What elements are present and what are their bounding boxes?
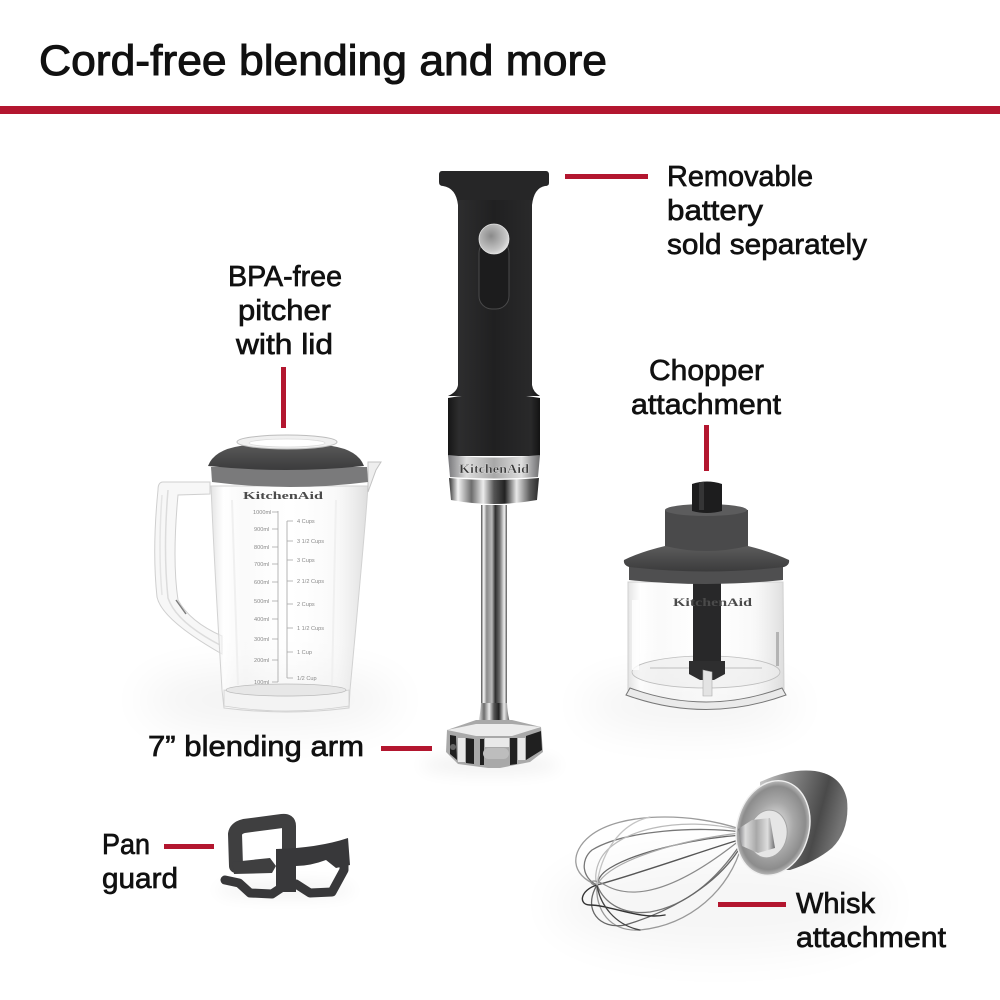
label: battery <box>667 195 764 227</box>
callout: pan guard <box>102 829 214 895</box>
shaft <box>481 505 507 705</box>
pitcher measurement scale: 3 Cups <box>297 558 315 564</box>
label: Pan <box>102 829 150 861</box>
leader line <box>381 746 432 751</box>
power button <box>479 224 509 254</box>
label: attachment <box>631 389 781 421</box>
leader line <box>281 367 286 428</box>
callout: removable battery <box>565 161 868 261</box>
label: Whisk <box>796 888 875 920</box>
leader line <box>565 174 648 179</box>
pan guard <box>225 821 350 894</box>
switch slot <box>479 240 509 309</box>
pitcher measurement scale: 4 Cups <box>297 519 315 525</box>
chopper <box>624 482 789 710</box>
label: sold separately <box>667 229 868 261</box>
callout: chopper <box>631 355 781 471</box>
handle body <box>439 171 549 504</box>
pitcher measurement scale: 2 Cups <box>297 602 315 608</box>
whisk head face <box>726 772 820 884</box>
leader line <box>718 902 786 907</box>
pitcher handle <box>155 482 222 654</box>
label: 7” blending arm <box>148 731 364 763</box>
label: with lid <box>235 329 333 361</box>
pitcher measurement scale: 3 1/2 Cups <box>297 539 324 545</box>
chopper lid disc <box>624 546 789 572</box>
pitcher jug <box>211 486 368 712</box>
pitcher measurement scale: 500ml <box>254 599 269 605</box>
leader line <box>164 844 214 849</box>
pitcher measurement scale: 100ml <box>254 680 269 686</box>
label: BPA-free <box>228 261 342 293</box>
whisk wires <box>576 817 742 930</box>
battery cap <box>439 171 549 205</box>
label: pitcher <box>238 295 331 327</box>
pitcher <box>155 435 381 712</box>
pitcher measurement scale: 1000ml <box>253 510 271 516</box>
whisk neck <box>745 807 791 861</box>
callout: blending arm <box>148 731 432 763</box>
chopper drive shaft <box>692 482 722 513</box>
pitcher measurement scale: 600ml <box>254 580 269 586</box>
label: guard <box>102 863 178 895</box>
blade guard <box>446 720 543 768</box>
floor shadows <box>140 672 890 955</box>
guard back loop <box>235 821 289 866</box>
chopper collar <box>665 506 748 551</box>
chopper brand: KitchenAid <box>673 597 753 609</box>
whisk ferrule <box>738 818 775 853</box>
label: attachment <box>796 922 946 954</box>
whisk <box>576 770 847 930</box>
guard front loop <box>225 848 344 894</box>
pitcher measurement scale: 200ml <box>254 658 269 664</box>
pitcher measurement scale: 1/2 Cup <box>297 676 317 682</box>
pitcher measurement scale: 800ml <box>254 545 269 551</box>
chopper inner shaft <box>693 583 721 663</box>
pitcher measurement scale <box>253 510 324 686</box>
pitcher measurement scale: 1 Cup <box>297 650 312 656</box>
pitcher measurement scale: 900ml <box>254 527 269 533</box>
pitcher measurement scale: 700ml <box>254 562 269 568</box>
steel band <box>448 455 540 478</box>
guard back foot <box>232 858 276 874</box>
guard front band and leg <box>276 838 350 892</box>
leader line <box>704 425 709 471</box>
blending arm and blade <box>446 505 543 768</box>
whisk head side <box>760 770 847 870</box>
bell <box>474 703 514 732</box>
chrome collar <box>449 478 539 504</box>
motor housing <box>448 394 540 456</box>
title: Cord-free blending and more <box>39 37 607 85</box>
label: Removable <box>667 161 813 193</box>
chopper lid ring <box>629 566 783 584</box>
pitcher measurement scale: 2 1/2 Cups <box>297 579 324 585</box>
callout: pitcher <box>228 261 342 428</box>
pitcher measurement scale: 1 1/2 Cups <box>297 626 324 632</box>
callout: whisk <box>718 888 946 954</box>
pitcher measurement scale: 300ml <box>254 637 269 643</box>
grip <box>448 200 540 396</box>
pitcher lid <box>211 467 368 487</box>
pitcher measurement scale: 400ml <box>254 617 269 623</box>
label: Chopper <box>649 355 764 387</box>
handle brand: KitchenAid <box>459 461 530 476</box>
chopper bowl <box>628 582 784 706</box>
pitcher brand: KitchenAid <box>243 490 323 502</box>
chopper blade hub <box>689 661 725 680</box>
title rule <box>0 106 1000 114</box>
